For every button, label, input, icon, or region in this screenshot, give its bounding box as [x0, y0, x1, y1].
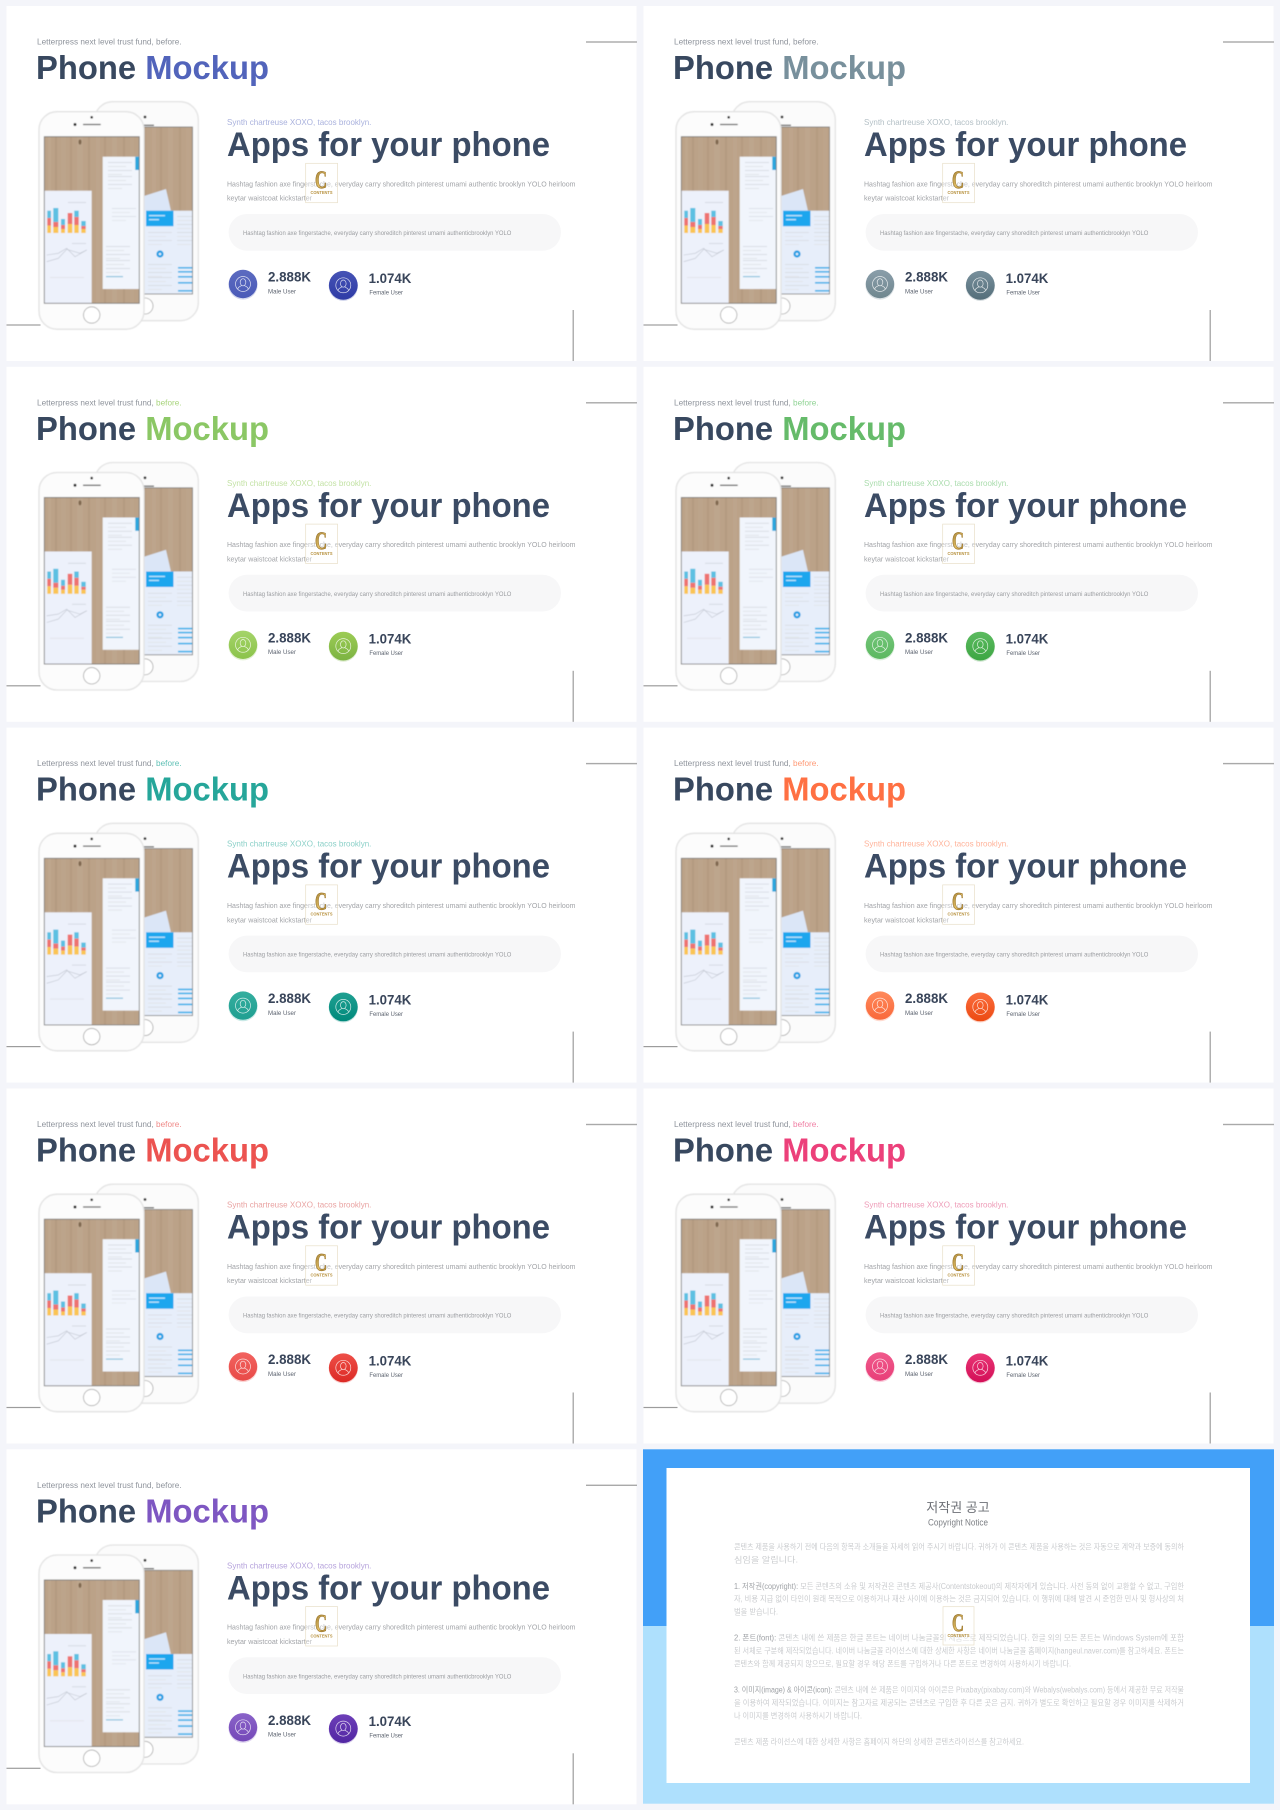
notice section 2: 콘텐츠와 함께 제공되지 않으므로, 필요할 경우 해당 폰트를 구입하거나 다른 폰트로 변경하여 사용하시기 바랍니다. — [734, 1658, 1071, 1668]
stat: male users: 2.888K — [905, 991, 948, 1006]
title: Phone Mockup — [36, 50, 269, 87]
stat: female users: Female User — [369, 650, 404, 657]
watermark: CONTENTS — [310, 1272, 332, 1278]
watermark — [306, 885, 338, 924]
white card — [666, 1468, 1250, 1783]
pill callout — [229, 214, 561, 251]
stat: male users: Male User — [905, 288, 934, 295]
stat: female users: Female User — [1006, 289, 1041, 296]
watermark: C — [952, 1250, 964, 1276]
eyebrow text: Letterpress next level trust fund, before. — [674, 1119, 819, 1129]
stat: male users: 2.888K — [268, 1713, 311, 1728]
stat: male users: Male User — [905, 1371, 934, 1378]
notice section 1: 자, 비용 지급 없이 타인이 원래 목적으로 이용하거나 재산 사이에 이용하는 것은 금지되어 있습니다. 이 행위에 대해 발견 시 준엄한 민사 및 형사상의 처 — [734, 1594, 1184, 1604]
heading: Apps for your phone — [227, 1208, 550, 1246]
watermark — [943, 1246, 974, 1285]
pill callout: Hashtag fashion axe fingerstache, everyday carry shoreditch pinterest umami authenticbrooklyn YOLO — [243, 1312, 511, 1320]
icon: male user — [228, 1713, 258, 1743]
stat: male users: 2.888K — [905, 630, 948, 645]
stat: female users: 1.074K — [1006, 992, 1049, 1007]
stat: male users — [268, 1352, 311, 1378]
icon: female user — [966, 632, 995, 662]
watermark: CONTENTS — [310, 912, 332, 917]
stat: male users: Male User — [268, 1371, 297, 1378]
icon: female user — [329, 632, 358, 662]
stat: female users: Female User — [1006, 1011, 1041, 1018]
stat: male users: Male User — [905, 649, 934, 656]
slide 9: purple — [6, 1449, 637, 1804]
slide 2: blue grey — [644, 6, 1274, 361]
icon: female user — [966, 992, 995, 1022]
stat: male users: 2.888K — [268, 270, 311, 284]
heading: Apps for your phone — [227, 487, 550, 525]
icon: female user — [329, 1714, 358, 1744]
notice subtitle: Copyright Notice — [928, 1518, 988, 1528]
notice section 2 — [734, 1633, 1185, 1668]
pill callout: Hashtag fashion axe fingerstache, everyday carry shoreditch pinterest umami authenticbrooklyn YOLO — [880, 591, 1148, 598]
title: Phone Mockup — [36, 772, 269, 809]
icon: male user — [228, 631, 258, 660]
subtitle: Synth chartreuse XOXO, tacos brooklyn. — [864, 478, 1008, 488]
body text — [864, 1262, 1212, 1285]
watermark: C — [315, 528, 327, 555]
slide 3: light green — [6, 367, 637, 722]
body text: keytar waistcoat kickstarter — [227, 1276, 312, 1285]
icon: male user — [865, 1352, 895, 1382]
body text — [227, 179, 576, 203]
subtitle: Synth chartreuse XOXO, tacos brooklyn. — [227, 1200, 371, 1210]
heading: Apps for your phone — [227, 1569, 550, 1607]
slide panel — [644, 728, 1274, 1083]
blue background bottom — [643, 1626, 1274, 1804]
watermark: CONTENTS — [310, 190, 332, 195]
pill callout: Hashtag fashion axe fingerstache, everyday carry shoreditch pinterest umami authenticbrooklyn YOLO — [880, 1312, 1148, 1320]
notice intro: 콘텐츠 제품을 사용하기 전에 다음의 항목과 소개들을 자세히 읽어 주시기 바랍니다. 귀하가 이 콘텐츠 제품을 사용하는 것은 자동으로 계약과 보증에 동의하 — [734, 1542, 1185, 1552]
slide panel — [644, 1088, 1274, 1444]
pill callout — [229, 936, 561, 972]
body text: keytar waistcoat kickstarter — [864, 1276, 949, 1285]
slide panel — [6, 1088, 636, 1444]
stat: male users — [905, 991, 948, 1017]
stat: female users: 1.074K — [1006, 1353, 1049, 1368]
phone mockups — [39, 1545, 201, 1772]
title: Phone Mockup — [36, 1132, 269, 1170]
watermark — [943, 885, 974, 924]
stat: female users: 1.074K — [369, 1353, 412, 1368]
watermark: CONTENTS — [948, 912, 970, 917]
subtitle: Synth chartreuse XOXO, tacos brooklyn. — [227, 1560, 371, 1570]
stat: female users: 1.074K — [369, 271, 412, 286]
stat: female users: 1.074K — [1006, 271, 1049, 286]
notice section 1: 1. 저작권(copyright): 모든 콘텐츠의 소유 및 저작권은 콘텐츠 제공사(Contentstokeout)의 제작자에게 있습니다. 사전 동의 없이 교환할 수 없고, 구입한 — [734, 1581, 1185, 1591]
phone mockups — [676, 462, 838, 690]
pill callout: Hashtag fashion axe fingerstache, everyday carry shoreditch pinterest umami authenticbrooklyn YOLO — [243, 591, 511, 598]
watermark: C — [315, 1610, 327, 1637]
phone mockups — [39, 102, 201, 329]
watermark: C — [952, 528, 964, 555]
subtitle: Synth chartreuse XOXO, tacos brooklyn. — [227, 117, 371, 127]
notice section 3: 을 이용하여 제작되었습니다. 이미지는 참고자료 제공되는 콘텐츠로 구입한 후 다른 곳은 금지. 귀하가 별도로 확인하고 필요할 경우 이미지를 삭제하거 — [734, 1697, 1184, 1707]
icon: male user — [865, 991, 895, 1021]
eyebrow text: Letterpress next level trust fund, before. — [674, 397, 819, 407]
icon: male user — [865, 631, 895, 660]
stat: female users: Female User — [1006, 1372, 1041, 1379]
icon: female user — [966, 1353, 995, 1383]
pill callout — [866, 936, 1198, 972]
body text: Hashtag fashion axe fingerstache, everyday carry shoreditch pinterest umami authentic brooklyn YOLO heirloom — [864, 901, 1212, 910]
stat: female users: Female User — [1006, 650, 1041, 657]
phone mockups — [39, 823, 201, 1051]
watermark: CONTENTS — [948, 1633, 970, 1638]
eyebrow text: Letterpress next level trust fund, before. — [37, 397, 182, 407]
watermark — [306, 524, 338, 564]
eyebrow text: Letterpress next level trust fund, before. — [674, 37, 819, 47]
heading: Apps for your phone — [227, 848, 550, 886]
pill callout — [229, 1296, 561, 1333]
watermark: CONTENTS — [310, 551, 332, 556]
notice section 1 — [734, 1581, 1185, 1617]
body text: keytar waistcoat kickstarter — [864, 554, 949, 563]
stat: male users: 2.888K — [268, 1352, 311, 1367]
stat: female users — [369, 632, 412, 657]
slide panel — [6, 367, 636, 722]
stat: female users: Female User — [369, 1011, 404, 1018]
body text: Hashtag fashion axe fingerstache, everyday carry shoreditch pinterest umami authentic brooklyn YOLO heirloom — [227, 179, 576, 188]
stat: male users: Male User — [905, 1010, 934, 1017]
watermark — [943, 524, 974, 564]
body text — [864, 901, 1212, 924]
body text: keytar waistcoat kickstarter — [864, 194, 949, 203]
notice section 2: 된 서체로 구분해 제작되었습니다. 네이버 나눔글꼴 라이선스에 대한 상세한 사항은 네이버 나눔글꼴 홈페이지(hangeul.naver.com)를 참고하세요. 폰트는 — [734, 1646, 1184, 1656]
watermark: C — [952, 167, 964, 194]
stat: female users — [369, 1714, 412, 1740]
stat: male users — [268, 270, 311, 295]
body text: keytar waistcoat kickstarter — [227, 194, 312, 203]
eyebrow text: Letterpress next level trust fund, before. — [37, 1119, 182, 1129]
body text — [227, 540, 576, 564]
title: Phone Mockup — [673, 50, 906, 87]
slide panel — [644, 6, 1274, 361]
watermark: CONTENTS — [948, 551, 970, 556]
notice title: 저작권 공고 — [926, 1500, 990, 1515]
stat: male users: Male User — [268, 1010, 297, 1017]
panel: copyright notice — [643, 1449, 1274, 1804]
stat: female users — [1006, 271, 1049, 296]
stat: female users: Female User — [369, 1372, 404, 1379]
slide 7: red — [6, 1088, 637, 1444]
pill callout: Hashtag fashion axe fingerstache, everyday carry shoreditch pinterest umami authenticbrooklyn YOLO — [243, 1673, 511, 1680]
icon: male user — [865, 270, 895, 300]
icon: female user — [329, 271, 358, 301]
watermark — [306, 163, 338, 203]
pill callout — [866, 214, 1198, 251]
stat: female users — [1006, 632, 1049, 657]
body text — [227, 1623, 576, 1646]
icon: male user — [228, 270, 258, 300]
stat: female users — [369, 271, 412, 296]
eyebrow text: Letterpress next level trust fund, before. — [37, 758, 182, 768]
slide panel — [644, 367, 1274, 722]
slide panel — [6, 1449, 636, 1804]
phone mockups — [39, 1184, 201, 1412]
body text: keytar waistcoat kickstarter — [227, 554, 312, 563]
body text — [227, 1262, 576, 1285]
stat: female users — [369, 992, 412, 1018]
stat: male users: 2.888K — [905, 270, 948, 284]
stat: male users: Male User — [268, 649, 297, 656]
pill callout — [229, 1657, 561, 1694]
title: Phone Mockup — [673, 1132, 906, 1170]
subtitle: Synth chartreuse XOXO, tacos brooklyn. — [864, 117, 1008, 127]
watermark: C — [315, 1250, 327, 1276]
watermark: CONTENTS — [948, 1272, 970, 1278]
heading: Apps for your phone — [864, 848, 1187, 886]
body text — [864, 179, 1212, 203]
stat: female users: 1.074K — [369, 632, 412, 647]
pill callout: Hashtag fashion axe fingerstache, everyday carry shoreditch pinterest umami authenticbrooklyn YOLO — [243, 952, 511, 959]
watermark: CONTENTS — [948, 190, 970, 195]
watermark — [306, 1246, 338, 1285]
watermark: C — [952, 1610, 964, 1637]
stat: female users: 1.074K — [369, 1714, 412, 1729]
watermark: C — [952, 889, 964, 916]
pill callout — [866, 1296, 1198, 1333]
stat: male users: 2.888K — [268, 630, 311, 645]
phone mockups — [676, 1184, 838, 1412]
notice section 3: 3. 이미지(image) & 아이콘(icon): 콘텐츠 내에 쓴 제품은 이미지와 아이콘은 Pixabay(pixabay.com)와 Webalys(webalys.com) 등에서 제공한 무료 저작물 — [734, 1684, 1184, 1694]
stat: male users — [268, 991, 311, 1017]
body text: Hashtag fashion axe fingerstache, everyday carry shoreditch pinterest umami authentic brooklyn YOLO heirloom — [227, 540, 576, 549]
eyebrow text: Letterpress next level trust fund, before. — [37, 1480, 182, 1490]
slide 8: pink — [644, 1088, 1274, 1444]
stat: female users — [369, 1353, 412, 1379]
pill callout — [229, 575, 561, 612]
icon: female user — [329, 992, 358, 1022]
pill callout: Hashtag fashion axe fingerstache, everyday carry shoreditch pinterest umami authenticbrooklyn YOLO — [880, 230, 1148, 237]
heading: Apps for your phone — [227, 126, 550, 164]
slide panel — [6, 728, 636, 1083]
body text: Hashtag fashion axe fingerstache, everyday carry shoreditch pinterest umami authentic brooklyn YOLO heirloom — [227, 1262, 576, 1271]
stat: male users — [905, 630, 948, 656]
eyebrow text: Letterpress next level trust fund, before. — [674, 758, 819, 768]
stat: male users — [268, 630, 311, 656]
icon: female user — [329, 1353, 358, 1383]
stat: female users: Female User — [369, 1733, 404, 1740]
body text: Hashtag fashion axe fingerstache, everyday carry shoreditch pinterest umami authentic brooklyn YOLO heirloom — [227, 1623, 576, 1632]
body text: Hashtag fashion axe fingerstache, everyday carry shoreditch pinterest umami authentic brooklyn YOLO heirloom — [227, 901, 576, 910]
body text: Hashtag fashion axe fingerstache, everyday carry shoreditch pinterest umami authentic brooklyn YOLO heirloom — [864, 179, 1212, 188]
phone mockups — [676, 823, 838, 1051]
pill callout — [866, 575, 1198, 612]
title: Phone Mockup — [673, 772, 906, 809]
notice intro — [734, 1542, 1185, 1564]
icon: female user — [966, 271, 995, 301]
watermark — [306, 1607, 338, 1646]
notice section 2: 2. 폰트(font): 콘텐츠 내에 쓴 제품은 한글 폰트는 네이버 나눔글꼴의 제품으로 제작되었습니다. 한글 외의 모든 폰트는 Windows System에 포함 — [734, 1633, 1185, 1643]
icon: male user — [228, 991, 258, 1021]
pill callout: Hashtag fashion axe fingerstache, everyday carry shoreditch pinterest umami authenticbrooklyn YOLO — [880, 952, 1148, 959]
slide panel — [6, 6, 636, 361]
pill callout: Hashtag fashion axe fingerstache, everyday carry shoreditch pinterest umami authenticbrooklyn YOLO — [243, 230, 511, 237]
slide 5: teal — [6, 728, 637, 1083]
slide 6: orange — [644, 728, 1274, 1083]
notice section 3 — [734, 1684, 1184, 1720]
notice footer line: 콘텐츠 제품 라이선스에 대한 상세한 사항은 홈페이지 하단의 상세한 콘텐츠라이선스를 참고하세요. — [734, 1737, 1024, 1747]
body text: keytar waistcoat kickstarter — [227, 915, 312, 924]
heading: Apps for your phone — [864, 1208, 1187, 1246]
subtitle: Synth chartreuse XOXO, tacos brooklyn. — [864, 1200, 1008, 1210]
title: Phone Mockup — [36, 411, 269, 448]
stat: female users: 1.074K — [1006, 632, 1049, 647]
body text: Hashtag fashion axe fingerstache, everyday carry shoreditch pinterest umami authentic brooklyn YOLO heirloom — [864, 1262, 1212, 1271]
slide 4: green — [644, 367, 1274, 722]
body text: Hashtag fashion axe fingerstache, everyday carry shoreditch pinterest umami authentic brooklyn YOLO heirloom — [864, 540, 1212, 549]
body text: keytar waistcoat kickstarter — [864, 915, 949, 924]
watermark: CONTENTS — [310, 1633, 332, 1638]
body text — [227, 901, 576, 924]
phone mockups — [39, 462, 201, 690]
stat: male users — [905, 1352, 948, 1378]
notice intro: 심임을 알립니다. — [734, 1554, 798, 1564]
blue background top — [643, 1449, 1274, 1626]
title: Phone Mockup — [673, 411, 906, 448]
watermark — [943, 163, 974, 203]
slide 1: indigo — [6, 6, 637, 361]
phone mockups — [676, 102, 838, 329]
stat: male users: 2.888K — [905, 1352, 948, 1367]
title: Phone Mockup — [36, 1493, 269, 1530]
watermark: C — [315, 167, 327, 194]
subtitle: Synth chartreuse XOXO, tacos brooklyn. — [227, 478, 371, 488]
notice section 1: 벌을 받습니다. — [734, 1607, 778, 1617]
stat: male users — [268, 1713, 311, 1739]
subtitle: Synth chartreuse XOXO, tacos brooklyn. — [864, 839, 1008, 849]
body text: keytar waistcoat kickstarter — [227, 1637, 312, 1646]
stat: male users: 2.888K — [268, 991, 311, 1006]
subtitle: Synth chartreuse XOXO, tacos brooklyn. — [227, 839, 371, 849]
watermark — [943, 1607, 974, 1645]
stat: female users: 1.074K — [369, 992, 412, 1007]
stat: female users — [1006, 992, 1049, 1018]
heading: Apps for your phone — [864, 487, 1187, 525]
watermark: C — [315, 889, 327, 916]
eyebrow text: Letterpress next level trust fund, before. — [37, 37, 182, 47]
stat: male users: Male User — [268, 288, 297, 295]
notice section 3: 나 이미지를 변경하여 사용하시기 바랍니다. — [734, 1710, 862, 1720]
stat: female users — [1006, 1353, 1049, 1379]
stat: male users — [905, 270, 948, 295]
heading: Apps for your phone — [864, 126, 1187, 164]
body text — [864, 540, 1212, 564]
stat: male users: Male User — [268, 1732, 297, 1739]
icon: male user — [228, 1352, 258, 1382]
stat: female users: Female User — [369, 289, 404, 296]
